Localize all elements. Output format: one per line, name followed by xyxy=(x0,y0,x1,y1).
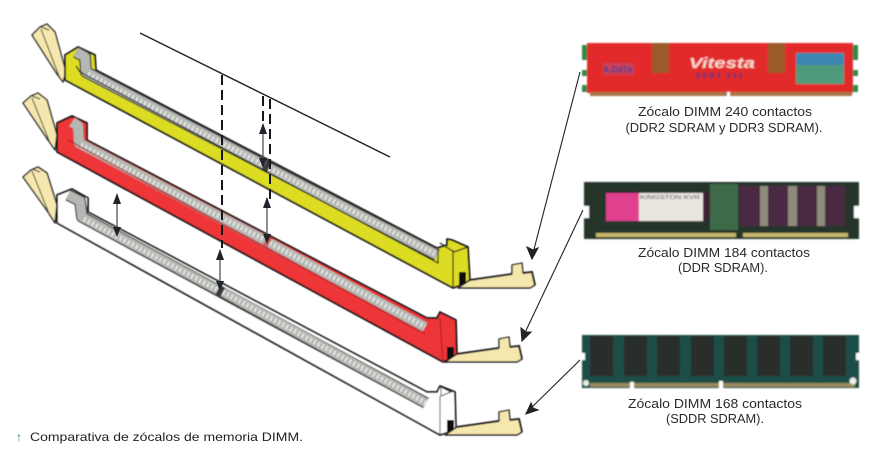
caption: 184 contacts: Zócalo DIMM 184 contactos xyxy=(638,245,811,260)
reference line xyxy=(140,33,390,157)
caption: 168 contacts: (SDDR SDRAM). xyxy=(666,411,764,426)
caption: 184 contacts: (DDR SDRAM). xyxy=(678,260,768,275)
dashed guide lines xyxy=(222,75,270,248)
right latch: yellow xyxy=(458,263,535,288)
module photo: DDR xyxy=(584,182,859,239)
yellow socket, 240 contacts xyxy=(32,24,470,288)
caption: 168 contacts xyxy=(628,396,803,426)
red socket, 184 contacts xyxy=(23,93,457,362)
module photo: SDRAM xyxy=(581,335,860,389)
module photo: DDR: KINGSTON KVR xyxy=(640,195,701,201)
caption: 240 contacts: (DDR2 SDRAM y DDR3 SDRAM). xyxy=(626,120,822,135)
right latch: red xyxy=(445,337,522,362)
module photo: red DDR2: DDR2 533 xyxy=(696,73,744,80)
caption: 240 contacts xyxy=(626,104,822,135)
caption: 168 contacts: Zócalo DIMM 168 contactos xyxy=(628,396,803,411)
figure caption: ↑ xyxy=(16,430,22,444)
leader arrows xyxy=(521,72,583,414)
caption: 240 contacts: Zócalo DIMM 240 contactos xyxy=(638,104,813,119)
module photo: red DDR2 xyxy=(582,43,858,97)
white socket, 168 contacts xyxy=(23,167,456,435)
spacing arrows xyxy=(113,123,271,291)
caption: 184 contacts xyxy=(638,245,811,275)
module photo: red DDR2: Vitesta xyxy=(689,55,755,72)
figure caption: Comparativa de zócalos de memoria DIMM. xyxy=(30,430,303,444)
module photo: red DDR2: A-DATA xyxy=(603,66,633,74)
right latch: white xyxy=(445,410,522,435)
